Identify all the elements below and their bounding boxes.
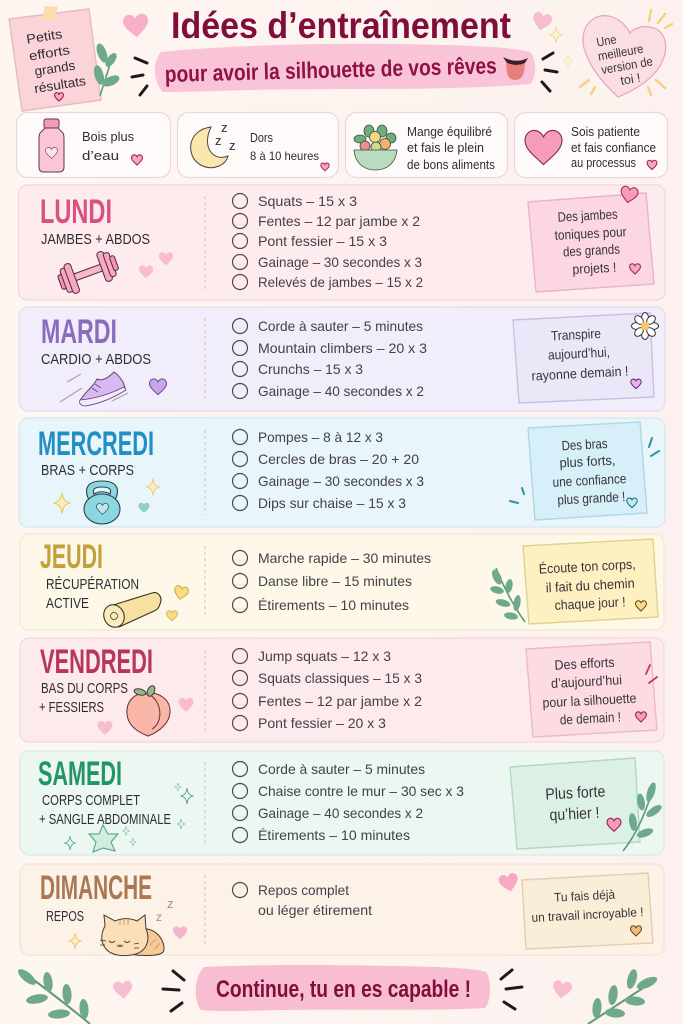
note: Des bras: [561, 436, 608, 453]
note: pour la silhouette: [542, 691, 637, 710]
note: projets !: [572, 260, 617, 277]
sticky note: petits efforts: [9, 6, 101, 111]
icon: salad bowl: [354, 125, 397, 170]
callout text: Une: [595, 32, 618, 50]
checklist: Fentes – 12 par jambe x 2: [258, 213, 420, 229]
tip card: alimentation: Mange équilibré: [407, 125, 492, 139]
focus: BRAS + CORPS: [41, 463, 134, 479]
note text: résultats: [33, 73, 87, 96]
panel: samedi: + SANGLE ABDOMINALE: [39, 812, 171, 828]
heart decoration: [123, 13, 149, 38]
checklist: Relevés de jambes – 15 x 2: [258, 274, 423, 290]
checklist: Dips sur chaise – 15 x 3: [258, 495, 406, 511]
checklist: Danse libre – 15 minutes: [258, 573, 412, 589]
burst marks bottom right: [501, 970, 522, 1009]
icon: dumbbell: [55, 248, 122, 297]
icon: branch: [489, 568, 525, 622]
tip card: sommeil: z: [215, 133, 222, 148]
icon: tongue emoji: [503, 57, 528, 80]
burst marks left of title: [132, 58, 147, 95]
panel: mardi: [19, 307, 665, 411]
note: Écoute ton corps,: [538, 557, 636, 577]
checklist: Gainage – 30 secondes x 3: [258, 473, 424, 489]
icon: heart: [525, 130, 562, 165]
panel: dimanche: z: [167, 896, 174, 911]
heart: [54, 93, 64, 101]
heading: VENDREDI: [40, 643, 153, 681]
focus: CARDIO + ABDOS: [41, 352, 151, 368]
icon: branch: [623, 781, 664, 851]
note: [510, 758, 640, 849]
checklist: Pompes – 8 à 12 x 3: [258, 429, 383, 445]
panel: vendredi: + FESSIERS: [39, 700, 104, 716]
checklist: [232, 193, 423, 290]
heart: [647, 160, 657, 170]
icon: yoga roll: [100, 593, 161, 631]
tip card: alimentation: [346, 112, 508, 178]
heart: [132, 155, 142, 165]
note: plus forts,: [559, 453, 616, 470]
note: Des jambes: [557, 207, 618, 225]
tip card: sommeil: z: [229, 138, 236, 153]
tip card: eau: Bois plus: [82, 129, 134, 144]
note: un travail incroyable !: [531, 905, 644, 925]
checklist: Corde à sauter – 5 minutes: [258, 318, 423, 334]
checklist: Pont fessier – 20 x 3: [258, 715, 386, 731]
note: toniques pour: [554, 224, 627, 243]
checklist: Étirements – 10 minutes: [258, 827, 410, 843]
burst marks bottom left: [163, 971, 184, 1011]
heading: SAMEDI: [38, 755, 122, 793]
checklist: Pont fessier – 15 x 3: [258, 233, 387, 249]
note: [510, 422, 659, 520]
heart: [321, 163, 329, 171]
callout text: meilleure: [597, 42, 645, 64]
icon: moon: [191, 127, 228, 168]
note text: efforts: [28, 42, 71, 63]
sparkle: [69, 933, 81, 949]
checklist: Gainage – 40 secondes x 2: [258, 383, 424, 399]
checklist: [232, 648, 422, 731]
heading: MARDI: [41, 313, 117, 351]
note text: [25, 24, 87, 96]
sparkle small: [563, 54, 573, 68]
checklist: [232, 550, 431, 613]
icon: sleeping cat: [100, 915, 164, 956]
tip card: eau: [16, 112, 170, 178]
icon: branch bottom right: [588, 968, 659, 1024]
icon: branch top left: [92, 42, 121, 96]
closing banner: Continue, tu en es capable !: [216, 976, 471, 1003]
heart: [498, 872, 520, 893]
icon: bottle: [39, 119, 64, 172]
panel: dimanche: z: [156, 910, 162, 924]
checklist: Squats classiques – 15 x 3: [258, 670, 422, 686]
heart: [150, 379, 166, 395]
subtitle banner: pour avoir la silhouette de vos rêves: [164, 52, 497, 87]
tip card: alimentation: et fais le plein: [407, 141, 484, 155]
note: il fait du chemin: [545, 576, 635, 595]
hearts: [139, 252, 173, 278]
hearts: [166, 585, 189, 621]
note: [523, 539, 658, 624]
checklist: Corde à sauter – 5 minutes: [258, 761, 425, 777]
heading: DIMANCHE: [40, 869, 152, 907]
sparkle: [550, 27, 562, 43]
checklist: Crunchs – 15 x 3: [258, 361, 363, 377]
tip card: patience: Sois patiente: [571, 125, 640, 139]
checklist: Cercles de bras – 20 + 20: [258, 451, 419, 467]
checklist: [232, 882, 372, 918]
callout text: version de: [600, 54, 654, 77]
heart bottom left: [113, 980, 133, 999]
note: Plus forte: [545, 783, 606, 804]
note: plus grande !: [557, 489, 626, 508]
tip card: patience: [514, 112, 668, 178]
note: [528, 186, 654, 292]
icon: sneaker: [60, 372, 128, 406]
checklist: Mountain climbers – 20 x 3: [258, 340, 427, 356]
heart: [173, 926, 187, 939]
title: Idées d’entraînement: [171, 5, 511, 46]
heart decoration right: [531, 11, 553, 32]
note: [526, 642, 657, 737]
note: rayonne demain !: [531, 363, 629, 384]
note: de demain !: [560, 709, 621, 728]
panel: lundi: [18, 185, 665, 300]
checklist: Repos complet: [258, 882, 349, 898]
note text: Petits: [25, 26, 64, 47]
closing banner: [196, 965, 490, 1011]
panel: jeudi: ACTIVE: [46, 596, 89, 612]
note: chaque jour !: [554, 594, 626, 613]
heading: MERCREDI: [38, 425, 154, 463]
tip card: patience: et fais confiance: [571, 141, 656, 155]
callout heart: une meilleure version: [580, 10, 672, 97]
icon: peach: [127, 685, 170, 736]
focus: JAMBES + ABDOS: [41, 232, 150, 248]
hearts: [98, 698, 194, 735]
tip card: eau: d’eau: [82, 148, 119, 163]
note: [513, 312, 658, 403]
callout text: [594, 27, 656, 91]
checklist: [232, 761, 464, 843]
focus: REPOS: [46, 909, 84, 925]
tip card: sommeil: Dors: [250, 130, 273, 145]
checklist: ou léger étirement: [258, 902, 372, 918]
note: Transpire: [551, 326, 601, 343]
checklist: Chaise contre le mur – 30 sec x 3: [258, 783, 464, 799]
note: Des efforts: [554, 655, 615, 673]
tip card: patience: au processus: [571, 156, 636, 170]
sparkles and heart: [54, 478, 160, 514]
checklist: [232, 429, 424, 511]
icon: flower: [632, 312, 658, 340]
subtitle banner: [155, 44, 535, 92]
heart bottom right: [551, 980, 573, 1000]
icon: kettlebell: [84, 481, 120, 524]
note: [522, 873, 653, 949]
panel: mercredi: [19, 418, 665, 527]
icon: star and sparkles: [64, 783, 193, 852]
tip card: sommeil: 8 à 10 heures: [250, 149, 319, 163]
panel: dimanche: [20, 864, 664, 956]
note: des grands: [563, 241, 621, 259]
heading: LUNDI: [40, 193, 112, 231]
checklist: [232, 318, 427, 399]
tape: [42, 6, 58, 22]
focus: BAS DU CORPS: [41, 681, 128, 697]
note: qu’hier !: [549, 805, 600, 824]
checklist: Fentes – 12 par jambe x 2: [258, 693, 422, 709]
burst marks right of title: [542, 53, 557, 91]
checklist: Étirements – 10 minutes: [258, 597, 409, 613]
note: aujourd’hui,: [548, 344, 610, 363]
panel: vendredi: [20, 638, 664, 742]
note text: grands: [33, 57, 77, 79]
checklist: Squats – 15 x 3: [258, 193, 357, 209]
checklist: Marche rapide – 30 minutes: [258, 550, 431, 566]
focus: CORPS COMPLET: [42, 793, 140, 809]
panel: jeudi: [20, 534, 664, 631]
rays: [580, 10, 672, 95]
tip card: sommeil: [178, 112, 338, 178]
tip card: sommeil: z: [221, 120, 228, 135]
heading: JEUDI: [40, 538, 103, 576]
tip card: alimentation: de bons aliments: [407, 158, 495, 172]
checklist: Gainage – 40 secondes x 2: [258, 805, 423, 821]
panel: samedi: [20, 751, 664, 855]
focus: RÉCUPÉRATION: [46, 576, 139, 593]
checklist: Jump squats – 12 x 3: [258, 648, 391, 664]
callout text: toi !: [619, 71, 642, 88]
checklist: Gainage – 30 secondes x 3: [258, 254, 422, 270]
icon: branch bottom left: [16, 966, 90, 1024]
note: d’aujourd’hui: [551, 672, 622, 691]
note: Tu fais déjà: [554, 888, 615, 905]
note: une confiance: [552, 471, 627, 490]
